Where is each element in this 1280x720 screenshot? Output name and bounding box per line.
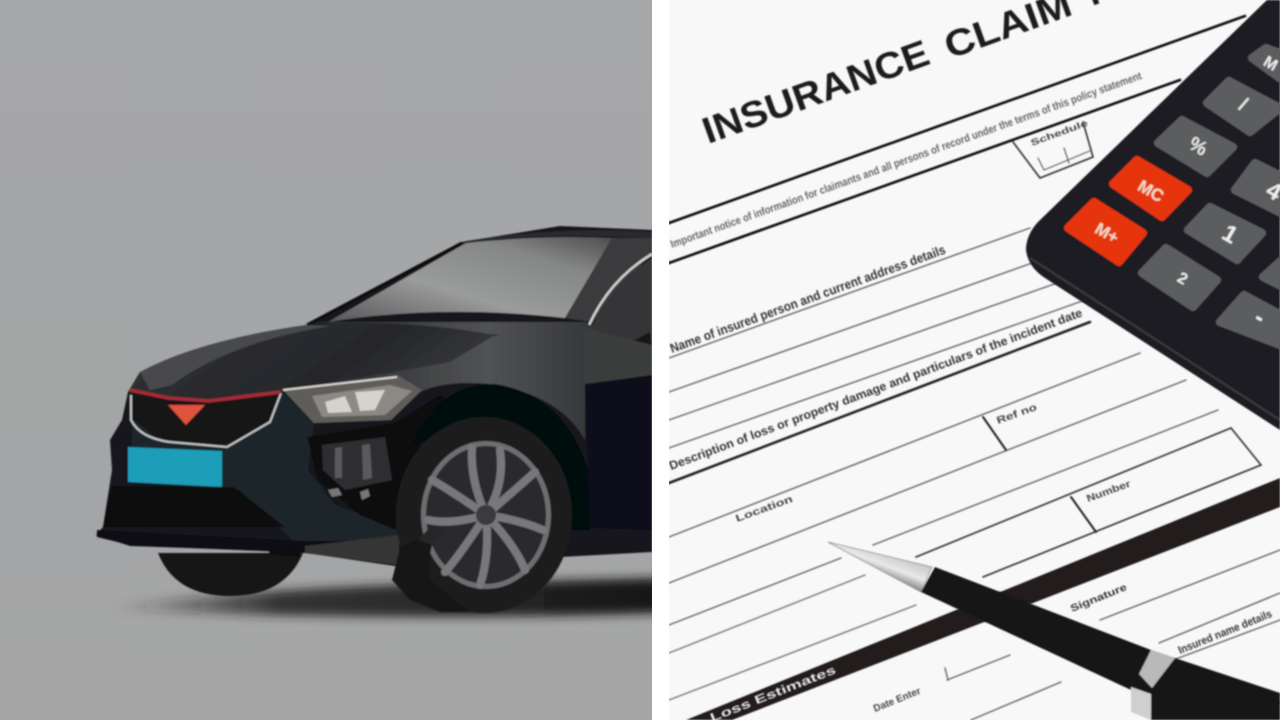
calculator key labels: 1 — [1217, 219, 1242, 250]
a-pillar — [565, 238, 652, 322]
title: insurance claim — [697, 0, 1116, 152]
windshield — [328, 237, 612, 322]
form small text: Ref no — [995, 402, 1038, 427]
calculator — [1026, 0, 1280, 430]
fender — [312, 320, 592, 440]
hood highlight — [140, 325, 330, 390]
panel: car photo — [0, 0, 660, 720]
calculator red keys — [1068, 160, 1188, 262]
form small text: Important notice of information for claimants and all persons of record under the terms of this policy statement — [669, 70, 1144, 251]
calculator key labels: % — [1185, 133, 1211, 161]
calculator key labels: M — [1260, 53, 1280, 75]
calculator key labels: M+ — [1092, 219, 1122, 248]
calculator key labels: 2 — [1174, 270, 1190, 289]
licence plate — [128, 447, 222, 487]
grille — [130, 390, 281, 446]
wheel spokes — [428, 448, 543, 585]
calculator key labels — [1092, 53, 1280, 331]
car body silhouette — [96, 226, 652, 566]
pen barrel — [921, 567, 1280, 720]
roof highlight — [466, 230, 652, 243]
hood — [128, 323, 495, 400]
form small text: Schedule — [1029, 118, 1089, 148]
calculator grey keys — [1142, 48, 1280, 347]
door panel — [585, 375, 652, 530]
damaged front corner — [307, 395, 452, 530]
a-pillar black trim — [307, 243, 462, 325]
ground shadow — [115, 578, 660, 617]
form lines — [669, 16, 1280, 720]
panel: insurance claim form photo — [667, 0, 1280, 720]
front fascia — [130, 391, 405, 547]
form small text: Number — [1085, 479, 1132, 505]
red badge — [168, 405, 205, 425]
form small text: Location — [734, 494, 794, 525]
side mirror — [634, 332, 652, 345]
form small text: Date Enter — [872, 686, 923, 715]
form small text — [667, 70, 1274, 720]
side window — [592, 258, 652, 344]
red hood line — [130, 390, 281, 401]
calculator key labels: - — [1250, 304, 1270, 331]
form small text: Name of insured person and current address details — [668, 242, 947, 356]
grille chrome trim — [131, 393, 281, 447]
pen clip — [1131, 687, 1151, 720]
dark band — [686, 478, 1280, 720]
pen ring — [1139, 650, 1175, 688]
pen tip — [828, 542, 932, 592]
splitter — [96, 529, 342, 554]
torn bumper over tyre — [391, 542, 470, 613]
pen — [828, 542, 1280, 720]
lower grille — [103, 486, 285, 527]
calculator key labels: MC — [1135, 176, 1167, 206]
calculator key labels: / — [1235, 94, 1251, 116]
form small text: Signature — [1069, 582, 1129, 615]
front wheel — [396, 417, 572, 613]
car — [96, 226, 652, 613]
form small text: Insured name details — [1177, 608, 1274, 657]
form small text: Description of loss or property damage and particulars of the incident date — [667, 305, 1084, 473]
rear wheel — [158, 553, 303, 596]
headlight — [283, 375, 422, 423]
title: insurance claim: INSURANCE — [697, 32, 935, 152]
wheel arch — [412, 384, 590, 530]
